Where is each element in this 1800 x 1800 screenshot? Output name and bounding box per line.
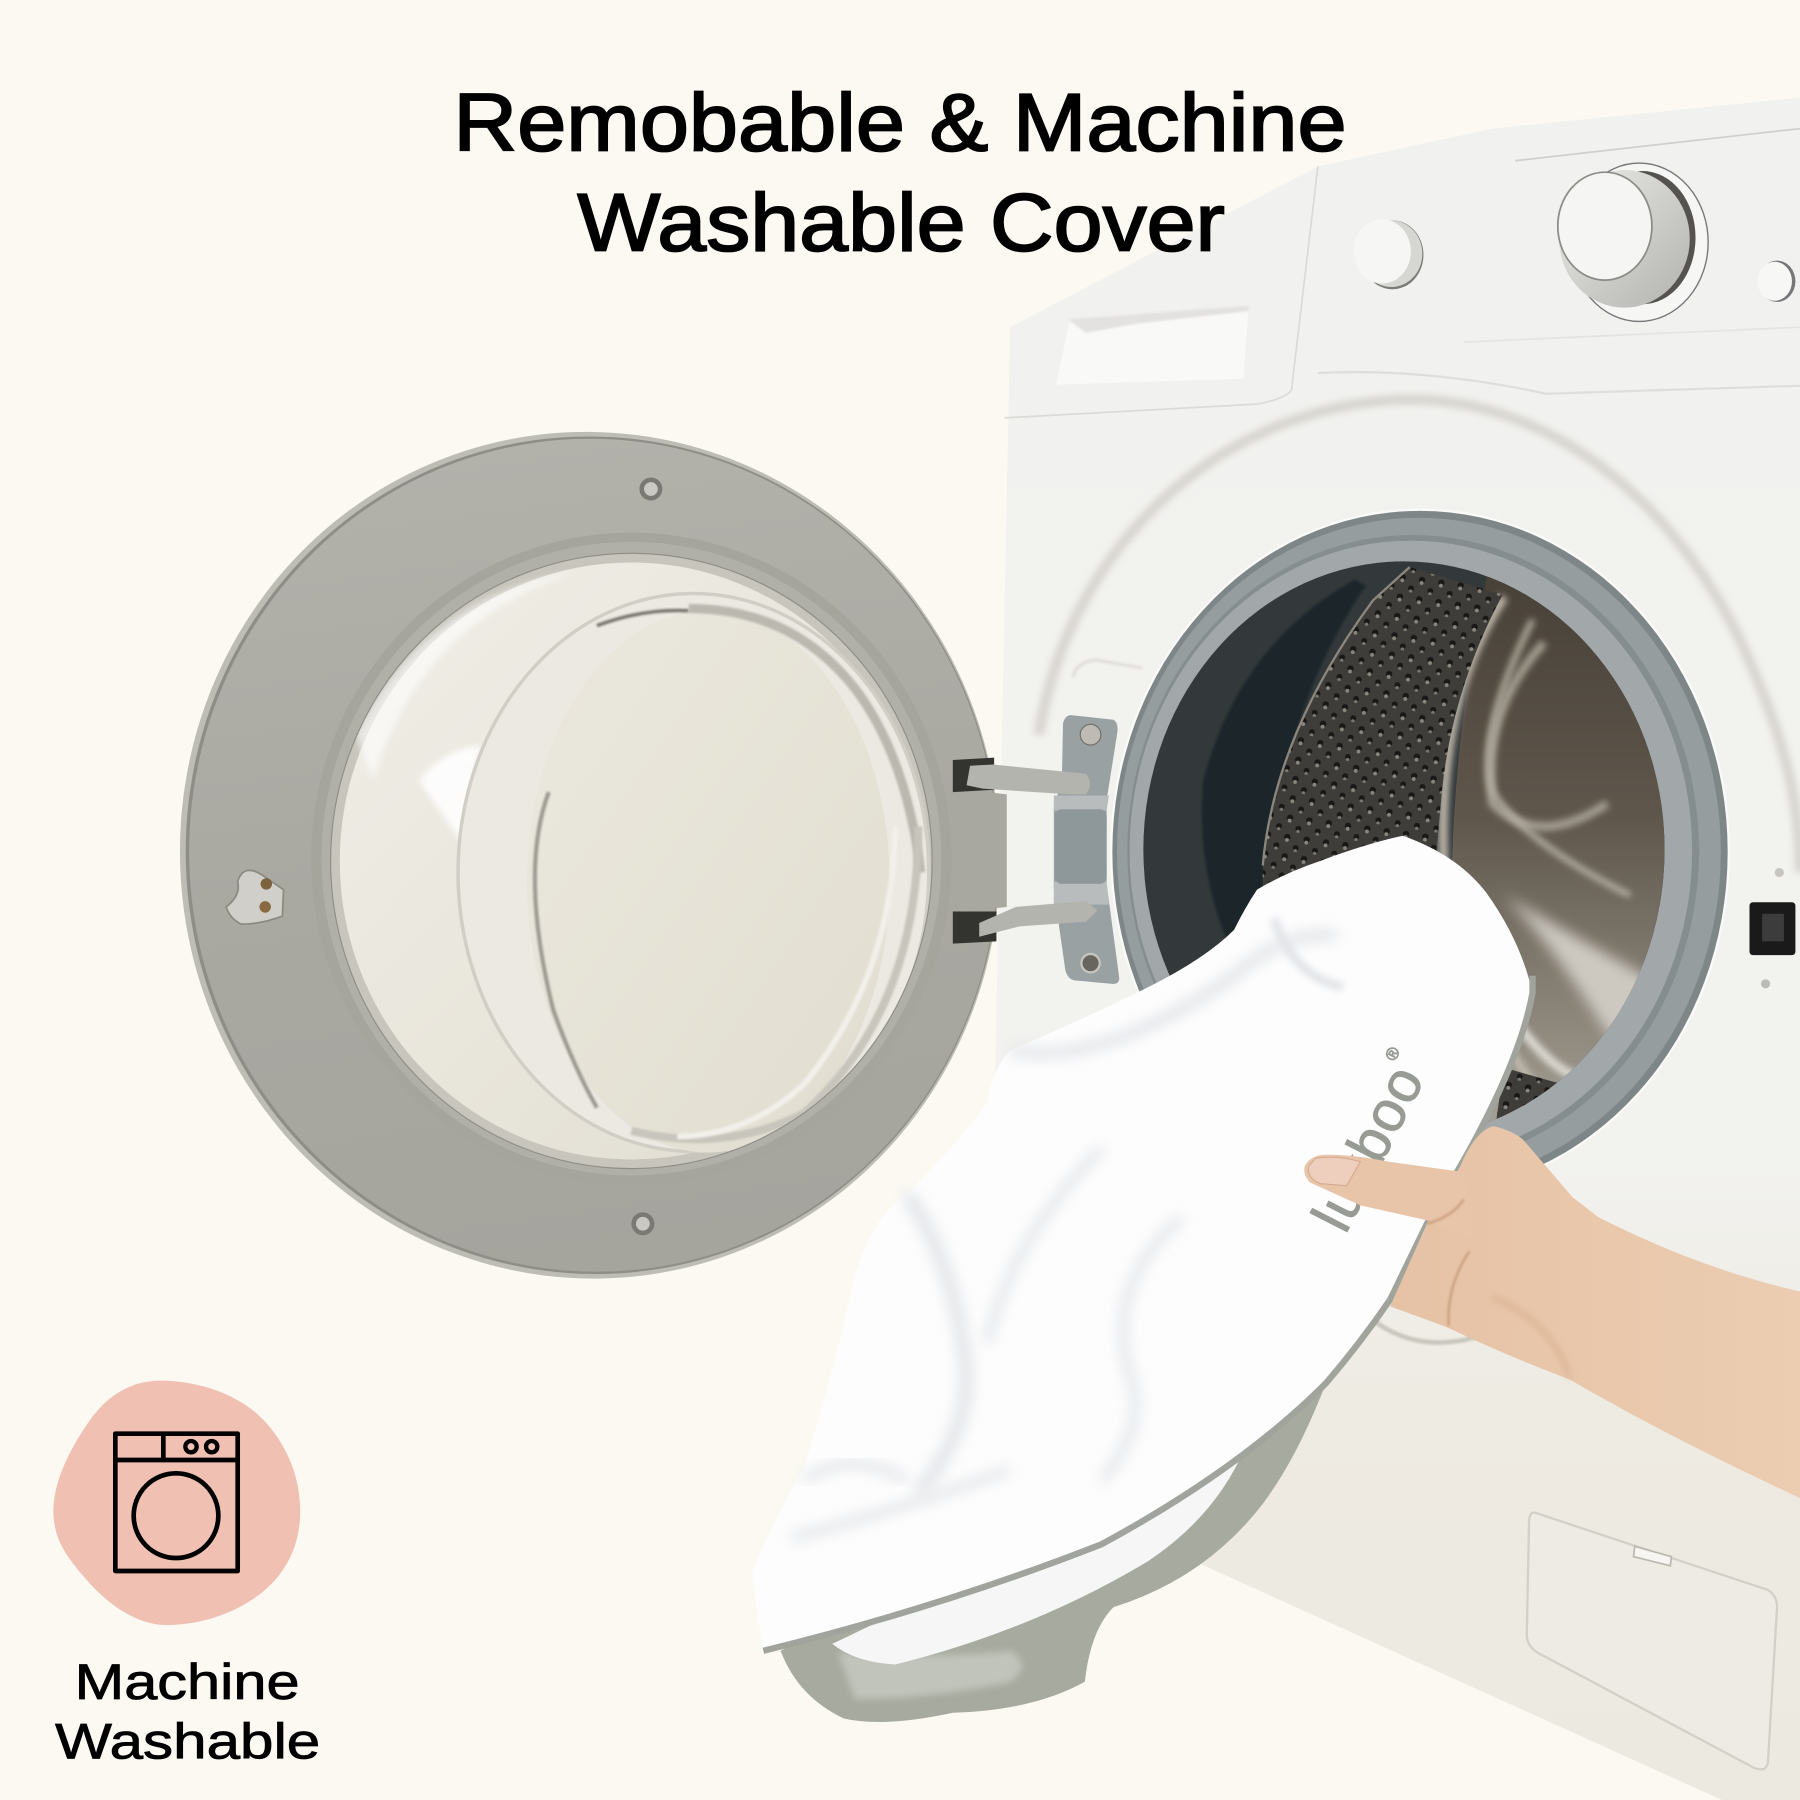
lower drum surround fold [1366, 1314, 1475, 1343]
embroidered logo: ® [1381, 1043, 1404, 1064]
washing machine body [995, 98, 1800, 1800]
detergent drawer handle [1056, 305, 1249, 385]
badge: machine washable [53, 1381, 320, 1770]
fabric folds [792, 918, 1343, 1538]
stainless drum [1452, 576, 1664, 1122]
palm and forearm [1390, 1126, 1800, 1498]
door screw top [639, 478, 662, 501]
door [180, 432, 1098, 1279]
title: Washable Cover [577, 177, 1225, 268]
thumbnail [1308, 1157, 1360, 1186]
service hatch [1527, 1513, 1777, 1769]
dark inner rim [1200, 579, 1366, 938]
small button [1758, 261, 1795, 302]
inner step [311, 533, 952, 1185]
upper hinge arm [967, 765, 1090, 794]
embroidered logo: luxboo [1300, 1056, 1437, 1241]
lower hinge arm [979, 901, 1097, 937]
glass bowl [331, 553, 932, 1169]
door tab [951, 788, 1007, 914]
removed cover [752, 836, 1533, 1722]
satin lining [781, 1383, 1326, 1722]
drum interior [1143, 561, 1665, 1122]
drum surround ridge [1039, 399, 1800, 872]
icon: washing machine on pink blob [53, 1381, 300, 1625]
badge label: Washable [55, 1713, 320, 1770]
badge label: Machine [75, 1653, 300, 1710]
thumb [1304, 1155, 1475, 1240]
main dial [1558, 163, 1708, 321]
door latch [226, 870, 284, 924]
door hinge assembly [1054, 715, 1119, 984]
status sensor [1749, 868, 1795, 988]
door screw bottom [631, 1212, 654, 1235]
hand and arm [1304, 1126, 1800, 1498]
small knob [1353, 219, 1423, 289]
control panel lines [1004, 129, 1800, 418]
hinge plate [1054, 715, 1119, 984]
door ring [125, 379, 1055, 1332]
badge label [55, 1653, 320, 1770]
palm creases [1427, 1200, 1469, 1326]
inner glass ring [458, 593, 929, 1151]
mesh interior [832, 1446, 1246, 1665]
grey trim [763, 976, 1533, 1651]
title [453, 77, 1347, 268]
glass reflection [420, 745, 481, 839]
door gasket [1110, 509, 1730, 1195]
white fabric [752, 836, 1533, 1651]
title: Remobable & Machine [453, 77, 1347, 168]
perforated band [1263, 567, 1503, 907]
